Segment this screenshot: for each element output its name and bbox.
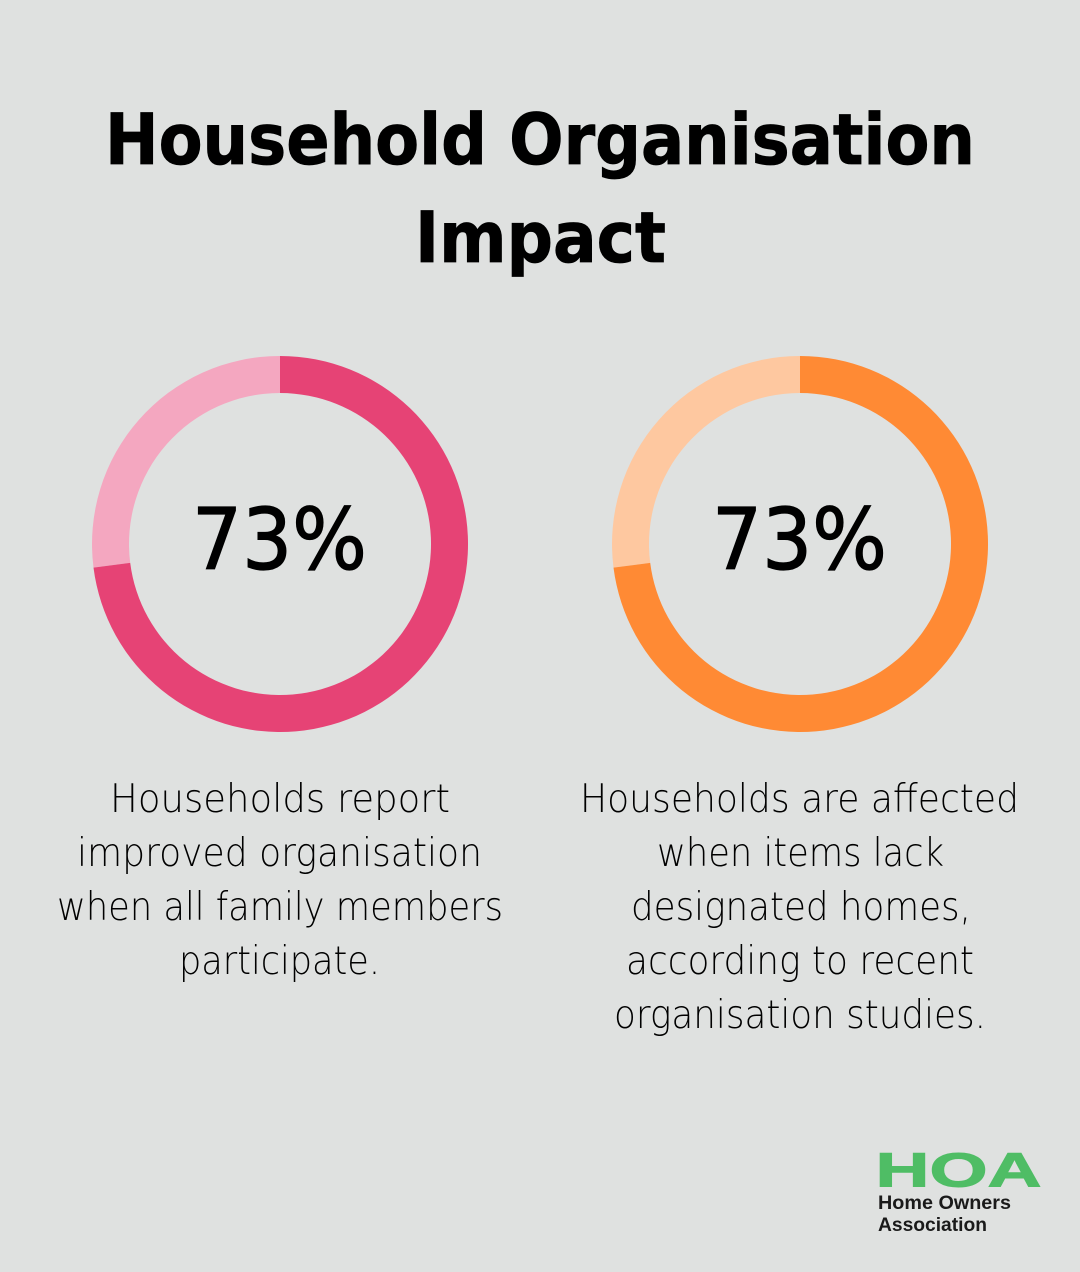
logo: Home Owners Association: Association: [878, 1214, 987, 1236]
description text: [57, 776, 503, 984]
panel: designated homes stat: [580, 356, 1019, 1038]
logo: Home Owners Association: Home Owners: [878, 1192, 1011, 1214]
panel: improved organisation stat: [57, 356, 503, 984]
percentage value: 73%: [192, 491, 367, 590]
description text: when items lack: [657, 830, 944, 876]
donut chart: pink 73%: [92, 356, 468, 732]
description text: designated homes,: [631, 884, 971, 930]
description text: Households report: [110, 776, 450, 822]
description text: organisation studies.: [614, 992, 986, 1038]
description text: according to recent: [626, 938, 974, 984]
logo: Home Owners Association: HOA: [876, 1144, 1042, 1198]
description text: [580, 776, 1019, 1038]
logo: Home Owners Association: [876, 1144, 1042, 1236]
description text: Households are affected: [580, 776, 1019, 822]
description text: improved organisation: [77, 830, 482, 876]
title: Impact: [415, 197, 666, 279]
description text: when all family members: [57, 884, 503, 930]
percentage value: 73%: [712, 491, 887, 590]
title: [105, 99, 975, 279]
description text: participate.: [179, 938, 380, 984]
title: Household Organisation: [105, 99, 975, 181]
donut chart: orange 73%: [612, 356, 988, 732]
